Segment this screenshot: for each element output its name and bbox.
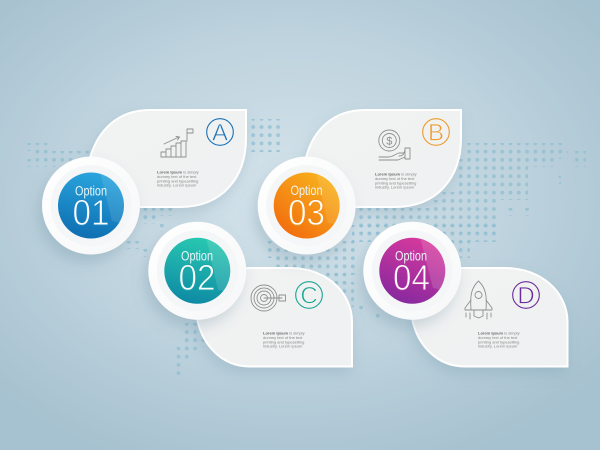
text block B: dummy text of the text [375,176,415,181]
panel: card D [412,268,568,366]
text block D: Lorem Ipsum is simply [478,330,520,336]
badge: option 03: 03 [288,192,325,233]
text block A: dummy text of the text [157,174,197,179]
letter badge C: C [300,282,318,310]
text block D: dummy text of the text [478,335,518,340]
text block D: printing and typesetting [478,339,519,344]
icon: dollar coin over hand: $ [386,136,392,148]
letter badge D [513,282,539,310]
letter badge A: A [212,120,228,146]
letter badge B [423,119,449,146]
text block A: industry. Lorem Ipsum [157,183,197,188]
text block C: Lorem Ipsum is simply [263,330,305,336]
badge: option 01: Option [75,184,107,198]
panel: card C [197,268,352,366]
text block A: Lorem Ipsum is simply [157,170,199,174]
text block C: printing and typesetting [263,339,304,344]
letter badge C [296,282,322,310]
letter badge D: D [517,282,535,310]
text block B: Lorem Ipsum is simply [375,172,417,176]
icon: target with arrow [251,285,286,311]
text block B: industry. Lorem Ipsum [375,185,415,190]
badge: option 03 [258,156,356,254]
badge: option 04: 04 [393,257,430,298]
badge: option 02 [148,222,246,320]
text block D: industry. Lorem Ipsum [478,344,518,349]
panel: card A [90,110,246,207]
text block C: industry. Lorem Ipsum [263,344,303,349]
letter badge A [207,119,233,146]
badge: option 04: Option [395,248,427,264]
badge: option 01: 01 [72,192,110,233]
dotted world map [25,119,586,379]
letter badge B: B [428,120,444,146]
text block C: dummy text of the text [263,335,303,340]
icon: dollar coin over hand [379,130,410,160]
badge: option 03: Option [290,183,322,198]
badge: option 01 [42,156,140,254]
badge: option 02: 02 [178,257,216,298]
icon: rising bar chart with flag [161,129,193,157]
icon: rocket [465,281,492,319]
panel: card B [306,110,461,207]
text block B: printing and typesetting [375,180,416,185]
text block A: printing and typesetting [157,178,198,183]
badge: option 02: Option [181,248,213,264]
badge: option 04 [363,222,461,320]
